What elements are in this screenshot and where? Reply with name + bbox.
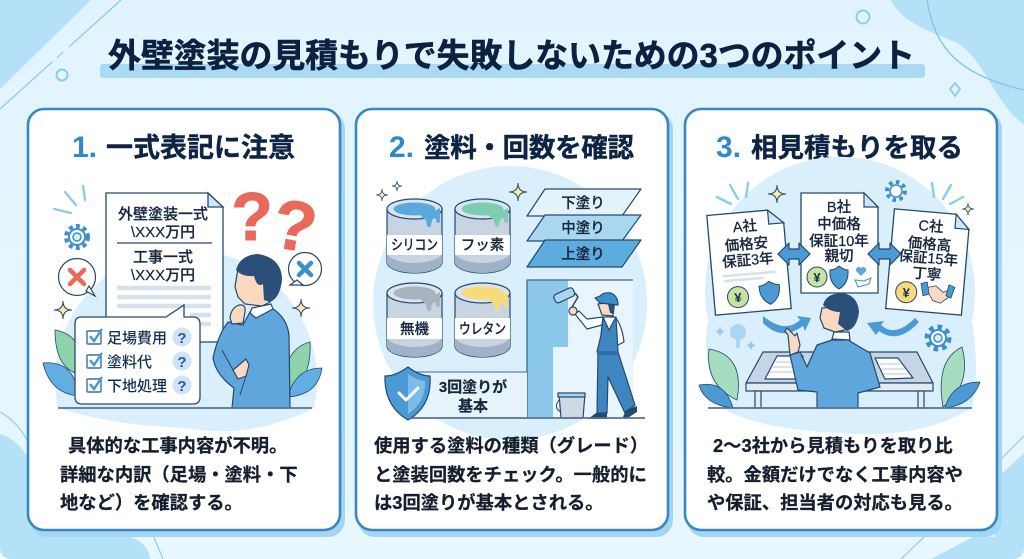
illustration background circle (705, 157, 976, 434)
document: company A: 保証3年 (721, 250, 774, 271)
document: company C: 保証15年 (898, 247, 959, 270)
body text 1: 詳細な内訳（足場・塗料・下 (60, 464, 298, 485)
icon: sparkles (376, 181, 527, 201)
icon: shield (385, 367, 430, 420)
panel: 3 comparing quotes (685, 109, 1002, 537)
paint can: silicon: シリコン (391, 238, 438, 254)
document: company A: A社 (732, 217, 758, 236)
body text 1: 具体的な工事内容が不明。 (68, 435, 287, 456)
icon: sparkle (54, 301, 72, 319)
question marks: ? (267, 184, 323, 268)
paint roller (553, 287, 578, 307)
paint can: silicon (387, 199, 442, 273)
note box: 3 coats: 基本 (458, 397, 488, 415)
icon: shield (830, 266, 848, 289)
document: company B (801, 193, 878, 293)
body text 1 (60, 435, 298, 513)
painter (553, 287, 637, 419)
plants (699, 347, 980, 408)
heading 1: 一式表記に注意 (106, 133, 295, 163)
document: company C (886, 209, 970, 315)
body text 2: 使用する塗料の種類（グレード） (374, 435, 648, 456)
icon: sparkle (292, 299, 310, 317)
row: groundwork: ? (177, 378, 187, 395)
note box: 3 coats: 3回塗りが (439, 378, 507, 396)
wall being painted (527, 280, 633, 418)
question marks (231, 179, 323, 268)
document: company B: 中価格 (817, 216, 861, 233)
arrow: B to C (868, 243, 901, 265)
row: scaffold (87, 328, 192, 347)
row: groundwork (87, 376, 192, 395)
icon: yen coin: ¥ (734, 290, 743, 305)
bucket (556, 393, 585, 418)
document: company A (707, 209, 791, 315)
paint can: inorganic (387, 283, 442, 357)
heading 3: 相見積もりを取る (751, 133, 963, 163)
row: paint: ? (177, 354, 187, 371)
person thinking (213, 254, 290, 408)
body text 2 (374, 435, 648, 513)
curved arrow: left (763, 316, 811, 333)
arrow: A to B (778, 243, 810, 265)
panel: 1 lump-sum notation (28, 109, 345, 537)
document: company A: 価格安 (724, 234, 769, 255)
curved arrow: right (867, 318, 919, 336)
icon: hand with heart (855, 267, 871, 287)
paper (765, 356, 803, 379)
illustration background circle (373, 166, 647, 440)
question marks: ? (231, 179, 273, 255)
document: 外壁塗装一式 (118, 206, 208, 223)
document: \XXX万円 (131, 224, 195, 241)
illustration background circle (55, 249, 317, 431)
layer: middle coat: 中塗り (561, 220, 605, 237)
document: company C: C社 (918, 217, 945, 236)
heading 2: 2. (389, 131, 414, 164)
document (106, 193, 223, 342)
icon: rays and gear (54, 186, 88, 248)
body text 3 (707, 435, 963, 513)
body text 3: 較。金額だけでなく工事内容や (707, 464, 963, 485)
paint can: inorganic: 無機 (400, 321, 429, 338)
row: scaffold: 足場費用 (107, 330, 167, 347)
icon: shield (759, 280, 781, 305)
paint can: fluorine (455, 199, 510, 273)
body text 3: 2〜3社から見積もりを取り比 (713, 435, 953, 456)
body text 2: は3回塗りが基本とされる。 (374, 492, 604, 513)
icon: yen coin: ¥ (902, 285, 911, 301)
heading 2: 塗料・回数を確認 (424, 133, 634, 163)
document: 工事一式 (133, 249, 193, 266)
document: company B: B社 (827, 199, 852, 216)
rays, gears and sparkles (717, 182, 974, 349)
row: groundwork: 下地処理 (107, 378, 167, 395)
document: company C: 丁寧 (912, 265, 942, 284)
paint can: urethane: ウレタン (459, 321, 506, 338)
paint can: fluorine: フッ素 (461, 237, 504, 254)
row: scaffold: ? (177, 330, 187, 347)
heading 1: 1. (72, 131, 97, 164)
body text 2: と塗装回数をチェック。一般的に (374, 464, 647, 485)
paint can: urethane (455, 283, 510, 357)
paper (875, 358, 913, 379)
person seen from behind (785, 293, 880, 408)
heading 3: 3. (716, 131, 741, 164)
document: company B: 親切 (824, 248, 854, 265)
body text 3: や保証、担当者の対応も見る。 (707, 492, 963, 513)
icon: lightbulb (716, 324, 756, 350)
icon: yen coin: ¥ (813, 270, 821, 285)
row: paint (87, 352, 192, 371)
checklist callout (75, 305, 200, 404)
note box: 3 coats (410, 372, 527, 418)
title: 外壁塗装の見積もりで失敗しないための3つのポイント (108, 37, 915, 74)
icon: handshake (919, 281, 955, 304)
layer: undercoat: 下塗り (561, 195, 605, 212)
coat layers (527, 189, 641, 267)
icon: red cross bubble (58, 258, 96, 296)
body text 1: 地など）を確認する。 (60, 492, 243, 513)
icon: blue cross bubble (288, 252, 322, 286)
document: \XXX万円 (131, 267, 195, 284)
document: company C: 価格高 (907, 234, 952, 255)
layer: top coat: 上塗り (561, 246, 605, 263)
panel: 2 paint and coats (356, 109, 673, 537)
document: company B: 保証10年 (809, 233, 869, 250)
plants (43, 330, 322, 397)
desk with papers (746, 352, 933, 408)
row: paint: 塗料代 (107, 354, 152, 371)
